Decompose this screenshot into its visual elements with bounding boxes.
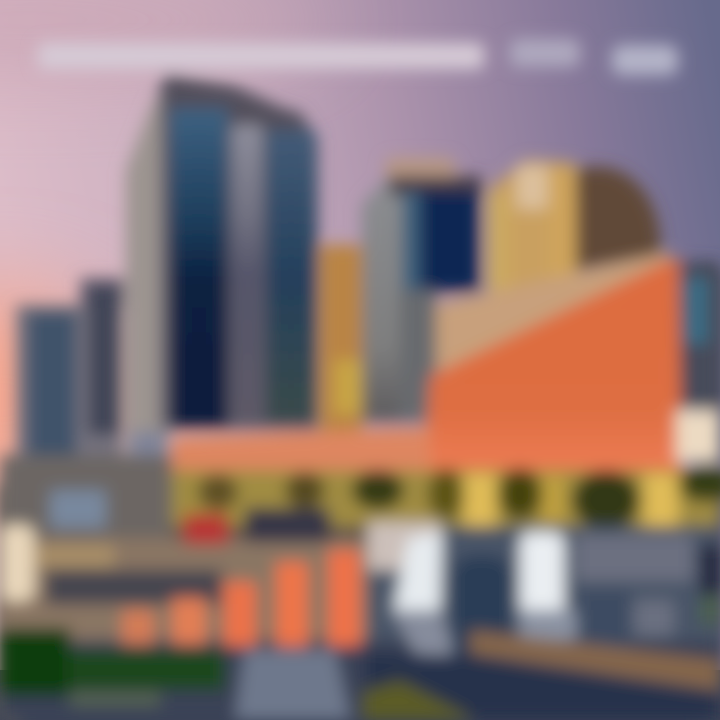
building: orange wall: [424, 258, 682, 474]
building: right glass block: [680, 262, 720, 408]
arcade: yellow columns: [170, 466, 720, 530]
building: brown domed block: [576, 167, 660, 270]
vehicle: blue-grey block: [50, 490, 106, 528]
building: beige sloped roof band: [436, 252, 670, 372]
band: dark grey deck: [46, 570, 222, 604]
road: dark lane: [365, 652, 720, 720]
road: pale grey road: [235, 650, 350, 720]
band: tan strip: [34, 545, 114, 567]
building: far left towers: [16, 278, 124, 465]
building: golden tower: [488, 160, 578, 300]
road: brown diagonal rail: [470, 630, 720, 690]
title: illegible blurred heading: [38, 39, 678, 75]
building: low orange podium: [172, 410, 720, 480]
building: tall glass tower: [126, 72, 318, 492]
columns: orange stepped bars: [122, 550, 360, 646]
building: centre grey tower: [362, 158, 482, 422]
glow: left warm light: [0, 525, 34, 601]
structure: white angled blocks: [368, 522, 720, 700]
ground: base tones: [0, 455, 720, 720]
vehicle: red car: [184, 514, 228, 544]
hedge: olive planting: [362, 680, 470, 720]
hedge: green bushes: [0, 628, 225, 706]
vehicle: dark cars: [245, 508, 330, 542]
building: orange distant tower: [320, 245, 366, 435]
